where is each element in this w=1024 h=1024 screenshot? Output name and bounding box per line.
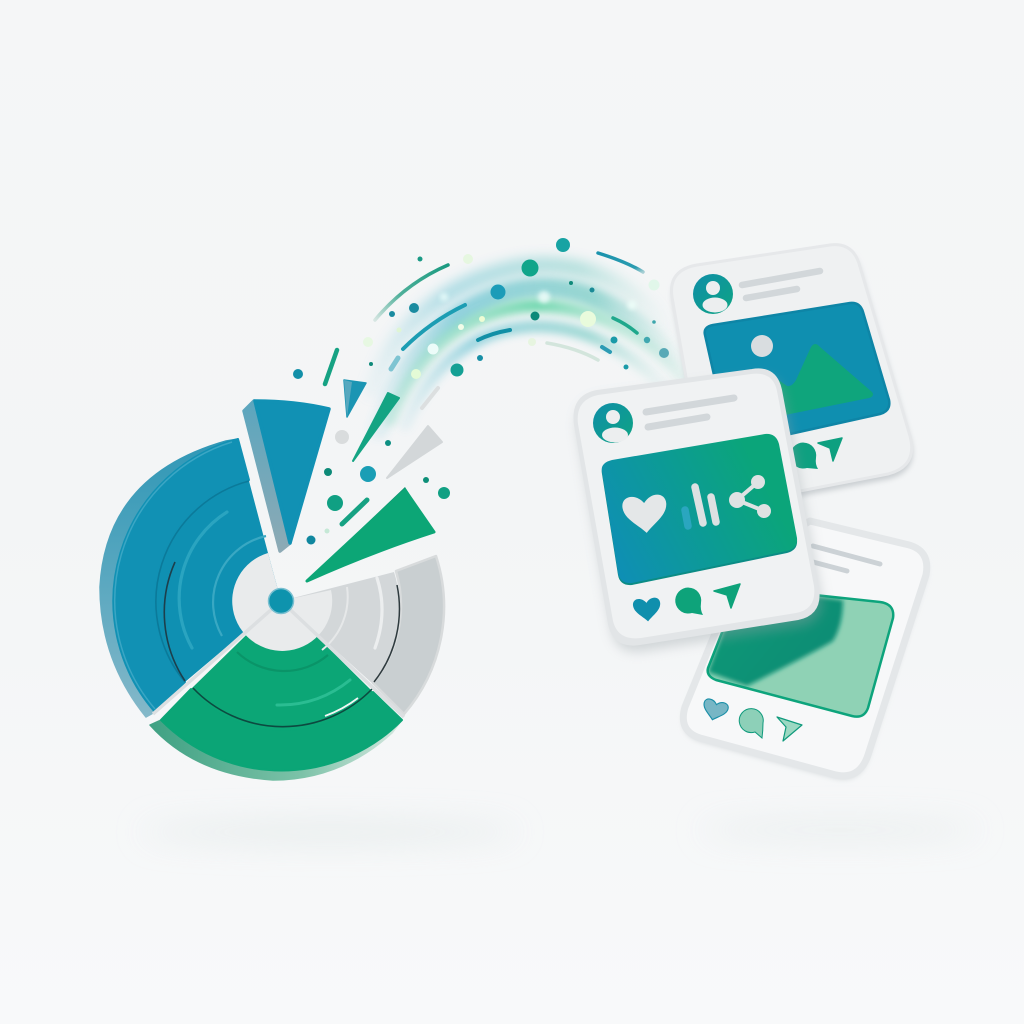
- heart button: [632, 597, 662, 623]
- pie chart: [100, 439, 444, 780]
- share icon: [729, 475, 771, 518]
- green needle shard: [353, 393, 399, 461]
- avatar: [693, 274, 733, 314]
- comment button: [675, 588, 703, 615]
- centre hub: [268, 588, 294, 614]
- back post card: image: [672, 245, 913, 510]
- text lines: [742, 271, 820, 298]
- glowing sparks: [363, 254, 660, 379]
- text lines: [813, 546, 880, 571]
- bar icon: [685, 487, 716, 526]
- small blue shard: [344, 380, 366, 417]
- avatar: [593, 403, 633, 443]
- chat bubble: [739, 709, 763, 738]
- front post card: [574, 369, 822, 652]
- green outer band: [161, 689, 402, 771]
- green outer band side: [150, 720, 402, 780]
- white centre: [232, 553, 332, 651]
- image panel: [705, 303, 889, 446]
- flying dashes: [325, 253, 643, 408]
- text lines: [646, 398, 734, 427]
- send arrow: [777, 717, 802, 741]
- blue outer band side: [100, 439, 238, 717]
- light swoosh trail: [372, 265, 688, 430]
- separators: [153, 601, 404, 717]
- gray shard: [387, 426, 442, 478]
- blue outer band: [113, 439, 249, 712]
- particle dots: [293, 238, 669, 544]
- send arrow: [818, 438, 842, 461]
- frosted image panel: [708, 587, 893, 717]
- bottom translucent post card: [683, 521, 927, 779]
- ground shadows: [140, 821, 980, 842]
- share button: [714, 584, 740, 608]
- mountain: [773, 344, 873, 416]
- flying blue wedge: [244, 401, 329, 551]
- chat bubble: [790, 443, 818, 469]
- blue outer highlight: [115, 442, 232, 709]
- sun: [751, 335, 773, 357]
- heart: [700, 698, 729, 723]
- blue middle band: [156, 481, 281, 682]
- flying green wedge: [305, 487, 434, 582]
- heart icon: [622, 494, 669, 535]
- gray middle band: [281, 572, 400, 684]
- green middle band: [191, 601, 373, 730]
- gradient image panel: [602, 434, 797, 585]
- gray outer band: [373, 556, 444, 714]
